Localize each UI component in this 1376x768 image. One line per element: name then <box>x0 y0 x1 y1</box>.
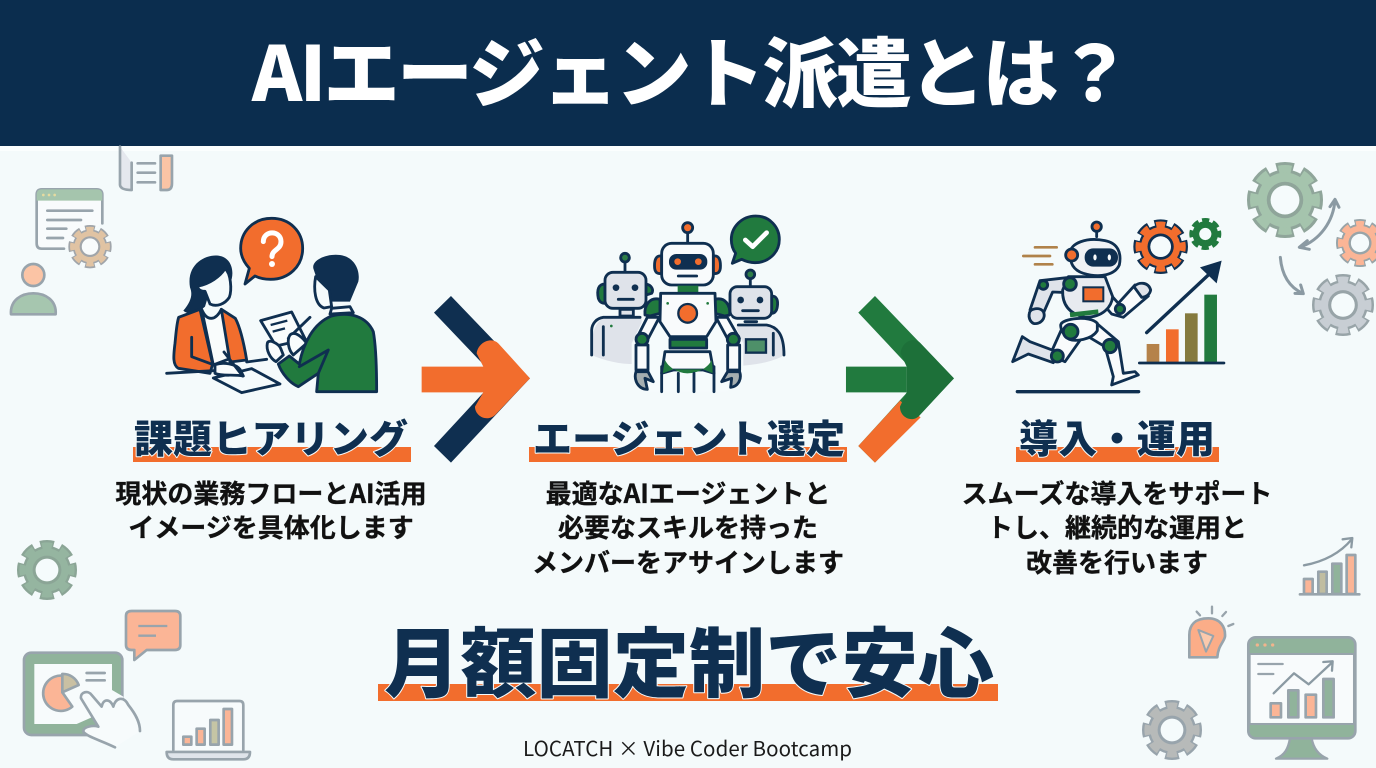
step 3 description: 改善を行います <box>1026 543 1208 580</box>
icon: orange gear <box>1139 225 1183 269</box>
step 3 description <box>962 474 1272 580</box>
icon: orange chat bubble <box>126 611 180 660</box>
title banner: AIエージェント派遣とは？ <box>251 13 1132 123</box>
center robot <box>632 223 743 392</box>
step 1 description: 現状の業務フローとAI活用 <box>115 474 427 511</box>
icon: growth chart top right <box>1300 538 1359 594</box>
man <box>261 255 377 392</box>
icon: right green gear <box>1255 170 1315 230</box>
icon: laptop bar chart <box>167 701 250 759</box>
step 2 illustration: robots <box>592 216 785 392</box>
icon: question bubble <box>241 218 303 284</box>
title banner <box>0 0 1376 146</box>
arrow 1 <box>422 296 530 463</box>
icon: speed lines <box>1023 247 1057 264</box>
footer credit: LOCATCH × Vibe Coder Bootcamp <box>523 732 852 762</box>
woman <box>167 255 280 393</box>
icon: settings window with gear <box>37 189 107 264</box>
ground line <box>1017 387 1139 397</box>
left robot <box>592 253 653 364</box>
icon: bottom right gray gear <box>1148 706 1196 754</box>
step 3 illustration: running robot and growth <box>1013 221 1224 392</box>
step 1 illustration: hearing <box>167 218 377 393</box>
icon: person <box>11 264 56 314</box>
icon: right gray gear <box>1318 280 1368 330</box>
step 2 description <box>532 474 844 580</box>
step 3 heading: 導入・運用 <box>1019 409 1215 465</box>
arrow 2 <box>846 296 954 463</box>
icon: right orange gear <box>1341 224 1376 262</box>
icon: monitor with chart <box>1248 637 1355 759</box>
step 1 description <box>115 474 427 545</box>
step 1 description: イメージを具体化します <box>128 508 414 545</box>
icon: head with idea <box>1189 607 1233 657</box>
step 2 description: 必要なスキルを持った <box>558 508 818 545</box>
step 2 description: メンバーをアサインします <box>532 543 844 580</box>
right robot <box>730 270 785 366</box>
step 3 description: スムーズな導入をサポート <box>962 474 1272 511</box>
icon: left green gear <box>23 546 71 594</box>
step 3 description: トし、継続的な運用と <box>987 508 1247 545</box>
icon: cycle arrows <box>1280 199 1339 294</box>
step 1 heading: 課題ヒアリング <box>134 409 408 465</box>
icon: background document <box>120 147 172 190</box>
icon: green gear <box>1193 221 1218 247</box>
bar chart <box>1139 261 1224 363</box>
robot runner <box>1013 222 1151 385</box>
step 2 description: 最適なAIエージェントと <box>546 474 830 511</box>
icon: check bubble <box>731 216 779 263</box>
pricing callout: 月額固定制で安心 <box>384 603 994 713</box>
icon: tablet with pie chart and hand <box>24 653 140 747</box>
step 2 heading: エージェント選定 <box>533 409 845 465</box>
